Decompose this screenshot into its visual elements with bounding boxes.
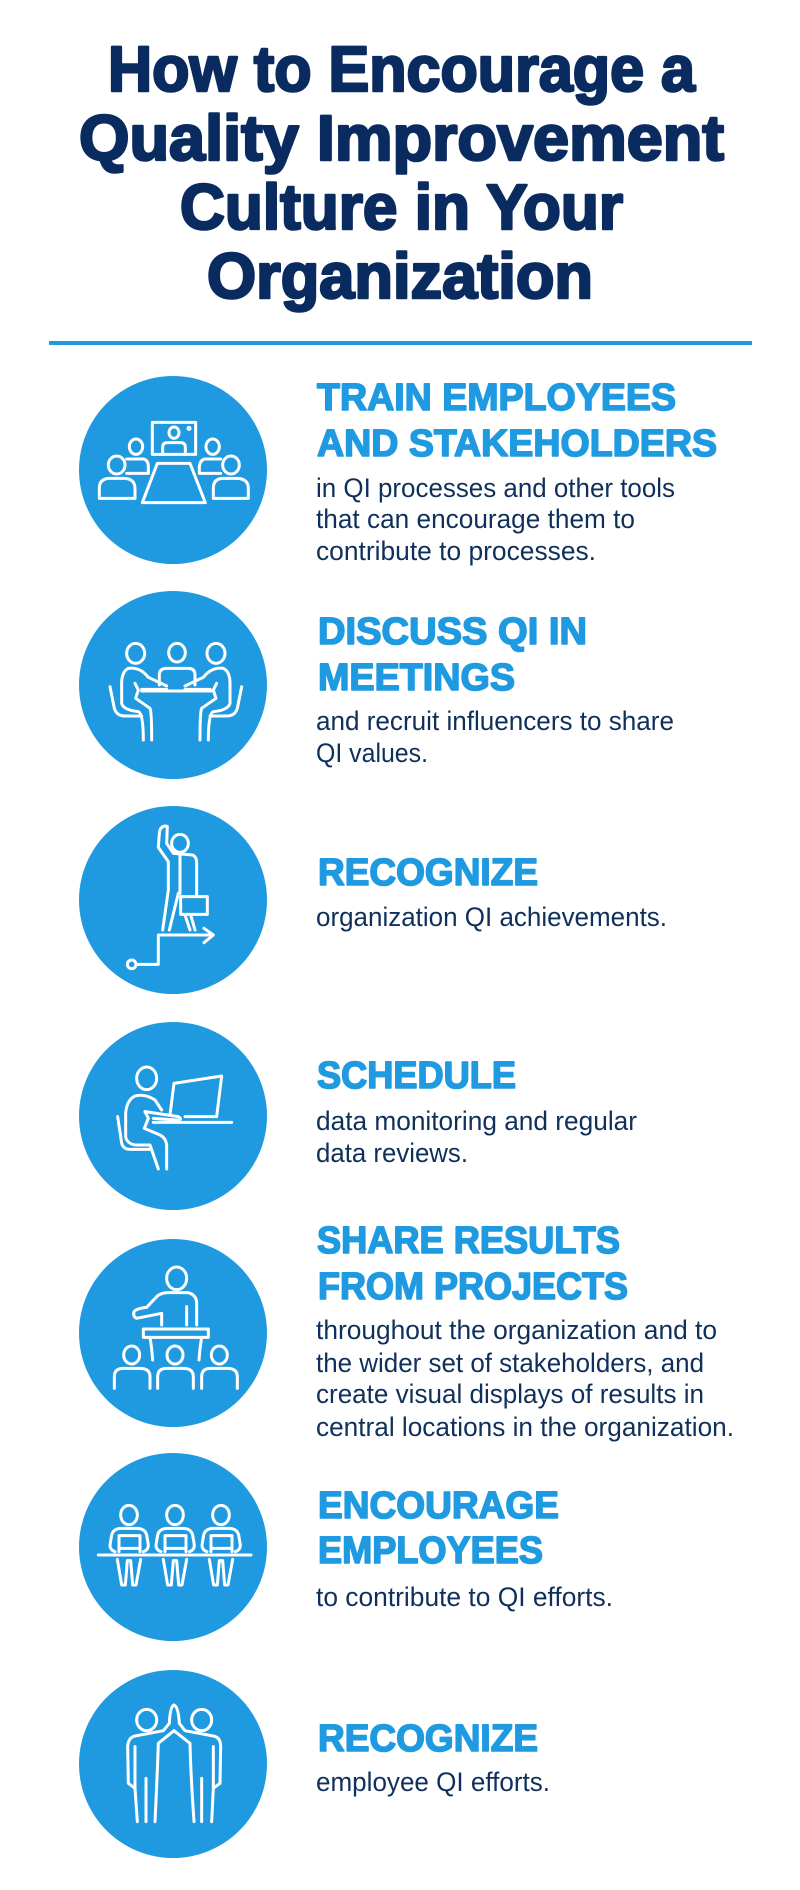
body text: throughout the organization and to bbox=[316, 1315, 717, 1345]
icon: meeting at table bbox=[79, 591, 267, 779]
heading: SCHEDULE bbox=[317, 1055, 516, 1097]
heading: EMPLOYEES bbox=[318, 1530, 543, 1572]
body text: that can encourage them to bbox=[316, 504, 635, 534]
body text: central locations in the organization. bbox=[316, 1412, 734, 1442]
panel: encourage employees bbox=[79, 1453, 613, 1641]
icon: video conference bbox=[79, 376, 267, 564]
body text bbox=[316, 1315, 734, 1442]
icon: presenter and audience bbox=[79, 1239, 267, 1427]
body text: create visual displays of results in bbox=[316, 1379, 704, 1409]
body text bbox=[316, 706, 674, 768]
heading: FROM PROJECTS bbox=[318, 1266, 628, 1308]
heading: RECOGNIZE bbox=[318, 1718, 538, 1760]
body text: organization QI achievements. bbox=[316, 902, 667, 932]
body text: data reviews. bbox=[316, 1138, 468, 1168]
heading: RECOGNIZE bbox=[318, 852, 538, 894]
title: Quality Improvement bbox=[79, 102, 724, 174]
icon: two people high five bbox=[79, 1670, 267, 1858]
body text: QI values. bbox=[316, 738, 428, 768]
body text bbox=[316, 1106, 637, 1168]
heading: TRAIN EMPLOYEES bbox=[317, 377, 676, 419]
title bbox=[79, 33, 724, 312]
title: Organization bbox=[207, 240, 593, 312]
panel: recognize employees bbox=[79, 1670, 550, 1858]
heading: MEETINGS bbox=[318, 657, 515, 699]
body text: the wider set of stakeholders, and bbox=[316, 1348, 704, 1378]
heading bbox=[317, 1220, 628, 1308]
heading: AND STAKEHOLDERS bbox=[317, 423, 717, 465]
icon: person on step with arrow bbox=[79, 806, 267, 994]
panel: discuss QI in meetings bbox=[79, 591, 674, 779]
heading bbox=[318, 1485, 559, 1572]
body text: and recruit influencers to share bbox=[316, 706, 674, 736]
heading: SHARE RESULTS bbox=[317, 1220, 620, 1262]
heading: DISCUSS QI IN bbox=[318, 611, 587, 653]
body text: contribute to processes. bbox=[316, 536, 596, 566]
title: How to Encourage a bbox=[108, 33, 695, 105]
panel: recognize organization bbox=[79, 806, 667, 994]
panel: schedule bbox=[79, 1022, 637, 1210]
body text: to contribute to QI efforts. bbox=[316, 1582, 613, 1612]
title: Culture in Your bbox=[180, 171, 623, 243]
panel: share results bbox=[79, 1220, 734, 1442]
heading bbox=[317, 377, 717, 465]
body text: in QI processes and other tools bbox=[316, 473, 675, 503]
heading: ENCOURAGE bbox=[318, 1485, 559, 1527]
body text: data monitoring and regular bbox=[316, 1106, 637, 1136]
icon: three people at laptops bbox=[79, 1453, 267, 1641]
panel: train employees bbox=[79, 376, 717, 566]
icon: person at computer bbox=[79, 1022, 267, 1210]
body text bbox=[316, 473, 675, 566]
body text: employee QI efforts. bbox=[316, 1767, 550, 1797]
heading bbox=[318, 611, 587, 699]
